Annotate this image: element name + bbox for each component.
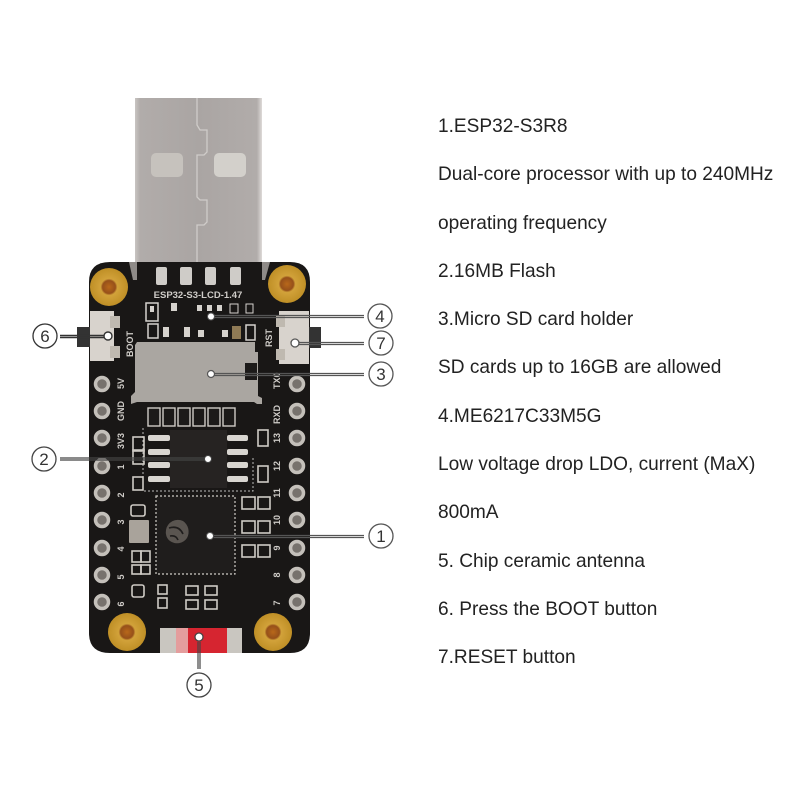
callout 4: [208, 304, 392, 328]
callout 1: [206, 524, 393, 548]
small top components: [146, 303, 255, 340]
red antenna: [160, 628, 242, 653]
callout 7: [291, 331, 393, 355]
silkscreen labels: 13: [272, 433, 282, 443]
callout 5: 5: [194, 676, 204, 695]
mounting holes: [90, 265, 306, 651]
feature list: Dual-core processor with up to 240MHz: [438, 164, 773, 185]
silkscreen labels: 9: [272, 545, 282, 551]
silkscreen labels: 3: [116, 519, 126, 525]
feature list: 3.Micro SD card holder: [438, 309, 633, 330]
callout 1: 1: [376, 527, 386, 546]
flash chip: [143, 428, 253, 491]
silkscreen labels: 6: [116, 601, 126, 607]
resistor row: [148, 408, 235, 426]
silkscreen labels: 4: [116, 546, 126, 552]
callout 7: 7: [376, 334, 386, 353]
silkscreen labels: ESP32-S3-LCD-1.47: [154, 290, 242, 301]
feature list: SD cards up to 16GB are allowed: [438, 357, 721, 378]
silkscreen labels: RXD: [272, 404, 282, 424]
silkscreen labels: 5V: [116, 378, 126, 389]
silkscreen labels: 8: [272, 572, 282, 578]
silkscreen labels: 12: [272, 461, 282, 471]
feature list: 1.ESP32-S3R8: [438, 116, 568, 137]
silkscreen labels: RST: [264, 328, 274, 347]
callout 2: [32, 447, 212, 471]
feature list: [438, 116, 773, 668]
BOOT button: [77, 311, 120, 361]
callout 3: [208, 362, 393, 386]
silkscreen labels: 3V3: [116, 433, 126, 449]
feature list: 2.16MB Flash: [438, 261, 556, 282]
silkscreen labels: 1: [116, 464, 126, 470]
silkscreen labels: 11: [272, 488, 282, 498]
header pads: [96, 378, 304, 608]
USB connector: [135, 98, 262, 266]
silkscreen labels: [116, 290, 282, 607]
USB solder pads: [156, 267, 241, 285]
callout 4: 4: [375, 307, 385, 326]
callout 2: 2: [39, 450, 49, 469]
callout 5: [187, 633, 211, 697]
feature list: operating frequency: [438, 213, 607, 234]
silkscreen labels: 2: [116, 492, 126, 498]
feature list: 4.ME6217C33M5G: [438, 406, 601, 427]
silkscreen labels: 7: [272, 600, 282, 606]
silkscreen labels: 5: [116, 574, 126, 580]
silkscreen labels: 10: [272, 515, 282, 525]
ceramic component: [129, 520, 149, 543]
SD card holder: [131, 342, 262, 404]
callout 6: [33, 324, 112, 348]
feature list: 7.RESET button: [438, 647, 576, 668]
ESP32-S3 chip: [156, 496, 235, 574]
PCB body: [77, 262, 321, 653]
silkscreen labels: TX0: [272, 372, 282, 389]
silkscreen labels: BOOT: [125, 330, 135, 357]
feature list: 800mA: [438, 502, 498, 523]
feature list: 6. Press the BOOT button: [438, 599, 657, 620]
callout 3: 3: [376, 365, 386, 384]
silkscreen labels: GND: [116, 400, 126, 421]
RST button: [276, 311, 321, 364]
small passive groups: [131, 430, 270, 609]
feature list: Low voltage drop LDO, current (MaX): [438, 454, 755, 475]
feature list: 5. Chip ceramic antenna: [438, 551, 645, 572]
callout 6: 6: [40, 327, 50, 346]
